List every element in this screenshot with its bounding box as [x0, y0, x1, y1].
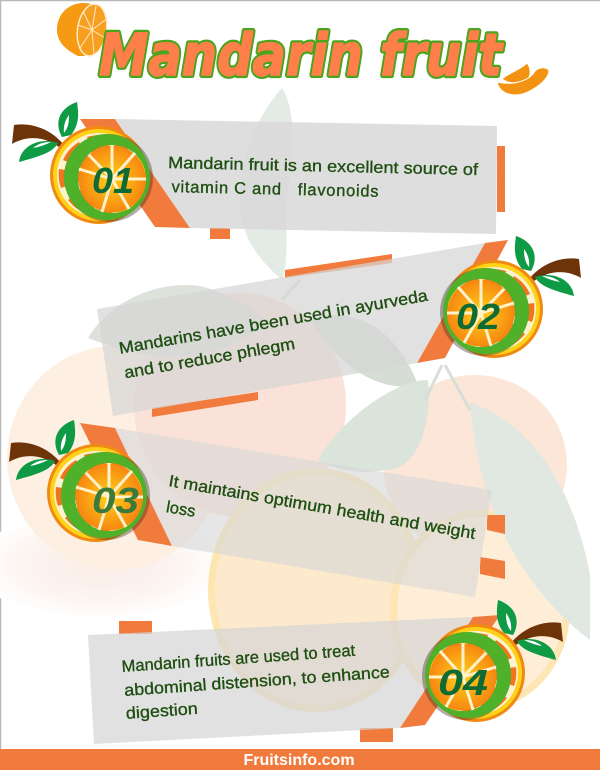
left orange: [7, 346, 223, 570]
stems: [282, 280, 470, 410]
lower leaf: [318, 380, 429, 472]
back tabs: [210, 146, 505, 239]
icon: fruit with number: 02: [456, 296, 500, 337]
shadow below oranges: [0, 510, 225, 620]
title: Mandarin fruit: [99, 21, 504, 89]
left leaf: [88, 285, 270, 356]
grey banner: [88, 617, 473, 744]
panel: fact 01: [12, 102, 505, 239]
fact text: digestion: [125, 700, 198, 723]
grey banner: [115, 119, 497, 234]
grey banner: [97, 243, 485, 416]
orange strip: [80, 119, 190, 228]
fact text: Mandarins have been used in ayurveda: [118, 287, 430, 358]
fact text: It maintains optimum health and weight: [167, 472, 477, 543]
fact text: abdominal distension, to enhance: [124, 663, 390, 700]
back tabs: [152, 254, 392, 417]
icon: fruit with number: 04: [438, 662, 488, 703]
back tabs: [119, 621, 393, 742]
icon: fruit with number: [9, 420, 147, 542]
icon: fruit with number: [443, 236, 581, 358]
right leaf: [470, 402, 590, 640]
icon: fruit with number: 03: [92, 480, 139, 521]
orange strip: [400, 615, 500, 728]
panel: fact 04: [88, 600, 563, 744]
background photo: mandarins and leaves: [0, 88, 590, 712]
fact text: Mandarin fruits are used to treat: [121, 642, 356, 676]
fact text: Mandarin fruit is an excellent source of: [168, 154, 479, 179]
fact text: [121, 639, 392, 723]
footer bar: [0, 749, 600, 770]
fact text: and to reduce phlegm: [123, 335, 296, 382]
icon: fruit with number: 01: [92, 160, 134, 201]
orange half, large: [208, 468, 424, 712]
fact text: [167, 154, 479, 203]
icon: fruit with number: [12, 102, 150, 224]
centre leaf: [310, 315, 418, 386]
right orange: [383, 375, 567, 555]
back tabs: [480, 515, 505, 579]
panel: fact 02: [97, 236, 581, 417]
panel: fact 03: [9, 420, 505, 597]
icon: orange slice top left: [57, 2, 110, 58]
fact text: [163, 472, 477, 569]
fact text: [118, 287, 434, 382]
fact text: loss: [165, 498, 197, 521]
icon: mandarin segments: [497, 63, 549, 95]
orange half, small: [390, 510, 570, 710]
title: Mandarin fruit: [99, 21, 504, 89]
footer text: Fruitsinfo.com: [243, 752, 355, 769]
orange strip: [80, 423, 172, 546]
middle orange: [134, 293, 346, 517]
grey banner: [115, 428, 492, 597]
orange strip: [417, 240, 508, 363]
top leaf: [240, 88, 293, 280]
fact text: vitamin C and flavonoids: [171, 178, 379, 201]
icon: fruit with number: [425, 600, 563, 722]
